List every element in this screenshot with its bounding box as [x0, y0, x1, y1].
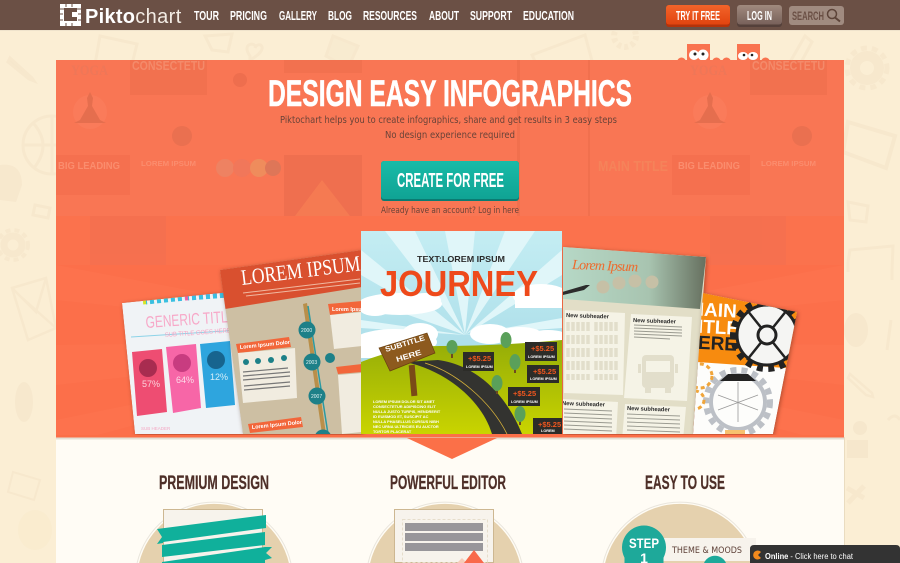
infographic card: gears [684, 293, 801, 434]
search box: SEARCH [792, 9, 824, 23]
heading: premium design: PREMIUM DESIGN [159, 473, 269, 494]
sunburst rays [56, 265, 844, 437]
infographic card: timeline: Lorem Ipsum Dolor [240, 340, 291, 351]
infographic card: timeline [220, 250, 367, 446]
infographic card: journey: +$5.25 [468, 354, 491, 363]
infographic card: journey: LOREM [541, 429, 555, 433]
nav links: TOUR [194, 8, 219, 23]
hero title: DESIGN EASY INFOGRAPHICS [268, 73, 632, 114]
call to action button [381, 161, 519, 201]
infographic card: journey: +$5.25 [533, 367, 556, 376]
login prompt: Already have an account? Log in here [381, 206, 519, 216]
button: try it free [666, 5, 730, 27]
faded template thumbnails: BIG LEADING [58, 161, 120, 172]
features section [56, 435, 845, 563]
infographic card: journey: LOREM IPSUM [528, 355, 555, 359]
sky rays [361, 231, 562, 335]
nav links: GALLERY [279, 8, 317, 23]
infographic card: generic title: 12% [210, 372, 228, 382]
live chat widget [750, 545, 900, 563]
infographic card: generic title: 64% [176, 375, 194, 385]
icon: easy to use steps: STEP [629, 535, 659, 551]
infographic card: journey: TEXT:LOREM IPSUM [417, 254, 505, 264]
arrow pointer [407, 438, 497, 459]
infographic card: business / transport: New subheader [627, 406, 671, 414]
button: log in: LOG IN [747, 9, 772, 23]
trees [446, 332, 526, 425]
infographic card: timeline: 2007 [311, 394, 322, 400]
faded template thumbnails: LOREM IPSUM [141, 161, 196, 168]
rainbow stripes [143, 295, 228, 302]
infographic card: journey: +$5.25 [531, 344, 554, 353]
button: try it free: TRY IT FREE [676, 9, 720, 23]
infographic card: journey: JOURNEY [380, 263, 538, 304]
infographic card: business / transport: New subheader [633, 318, 677, 326]
road [405, 360, 522, 434]
heading: powerful editor: POWERFUL EDITOR [390, 473, 506, 494]
body copy: ID EUISMOD ET, SUSCIPIT AC [373, 414, 429, 419]
infographic card: generic title [122, 291, 243, 434]
icon: Piktochart logo mark [60, 4, 81, 26]
hero subtitle: No design experience required [385, 130, 515, 141]
infographic card: generic title: GENERIC TITLE [145, 308, 236, 332]
price tags [463, 342, 562, 434]
infographic card: journey: HERE [395, 348, 422, 364]
infographic card: business / transport: New subheader [562, 401, 606, 409]
faded template thumbnails: CONSECTETU [752, 58, 825, 73]
infographic card: generic title: SUB TITLE GOES HERE [165, 327, 232, 339]
infographic card: timeline: Lorem Ipsum [332, 307, 367, 313]
nav links: RESOURCES [363, 8, 417, 23]
infographic card: timeline: 2000 [301, 328, 312, 334]
body copy: NEC URNA ULTRICIES EU AUCTOR [373, 424, 439, 429]
mascots peeking over panel [677, 44, 770, 62]
nav links: BLOG [328, 8, 352, 23]
nav links [194, 8, 574, 23]
infographic card: journey: LOREM IPSUM [466, 365, 493, 369]
icon: premium design ribbons [137, 502, 291, 563]
faded template thumbnails: LOREM IPSUM [761, 161, 816, 168]
faded template thumbnails: YOGA [690, 63, 727, 79]
infographic card: business / transport [561, 247, 706, 440]
infographic card: journey: LOREM IPSUM [530, 377, 557, 381]
nav links: PRICING [230, 8, 267, 23]
infographic card: business / transport: Lorem Ipsum [571, 258, 638, 275]
icon: chat status [753, 550, 761, 559]
infographic card: timeline: Lorem Ipsum Dolor [252, 420, 303, 431]
infographic card: journey: SUBTITLE [384, 333, 426, 354]
faded template thumbnails [56, 58, 844, 437]
icon: powerful editor document [368, 502, 522, 563]
icon: easy to use steps [603, 502, 757, 563]
infographic card: journey: +$5.25 [513, 389, 536, 398]
icon: easy to use steps: THEME & MOODS [671, 546, 742, 556]
button: log in [737, 5, 782, 27]
faded template thumbnails: MAIN TITLE [598, 158, 668, 175]
faded template thumbnails: YOGA [71, 63, 108, 79]
hero subtitle [280, 115, 617, 141]
infographic card: gears: MAIN [688, 299, 737, 323]
nav links: SUPPORT [470, 8, 512, 23]
infographic card: journey: +$5.25 [538, 420, 561, 429]
infographic card: gears: HERE [684, 332, 738, 356]
infographic card: business / transport: New subheader [566, 313, 610, 321]
infographic card: gears: TITLE [686, 316, 740, 340]
faded template thumbnails: BIG LEADING [678, 161, 740, 172]
infographic card: timeline: LOREM IPSUM [240, 251, 362, 290]
infographic card: timeline: 2003 [306, 360, 317, 366]
search box [789, 6, 844, 25]
body copy [373, 399, 441, 434]
body copy: TORTOR PLACERAT [373, 429, 412, 434]
clouds [353, 284, 570, 358]
nav links: ABOUT [429, 8, 459, 23]
hero subtitle: Piktochart helps you to create infographics, share and get results in 3 easy steps [280, 115, 617, 126]
hero panel [56, 58, 844, 446]
logo wordmark: Piktochart [85, 6, 182, 28]
bus icon [642, 355, 674, 388]
infographic card: generic title: SUB HEADER [141, 426, 171, 431]
infographic card: journey [353, 231, 570, 434]
nav links: EDUCATION [523, 8, 574, 23]
body copy: LOREM IPSUM DOLOR SIT AMET [373, 399, 435, 404]
navigation bar [0, 0, 900, 31]
infographic card: generic title: 57% [142, 379, 160, 389]
body copy: CONSECTETUR ADIPISCING ELIT [373, 404, 436, 409]
hill [361, 340, 562, 434]
body copy: NULLA JUSTO TURPIS, HENDRERIT [373, 409, 441, 414]
infographic card: journey: LOREM IPSUM [511, 400, 538, 404]
heading: easy to use: EASY TO USE [645, 473, 725, 494]
plane [562, 285, 590, 295]
call to action button: CREATE FOR FREE [397, 169, 504, 192]
chat label: Online - Click here to chat [765, 552, 854, 561]
faded template thumbnails: CONSECTETU [132, 58, 205, 73]
body copy: NULLA PHASELLUS CURSUS NIBH [373, 419, 439, 424]
signpost [409, 365, 417, 396]
